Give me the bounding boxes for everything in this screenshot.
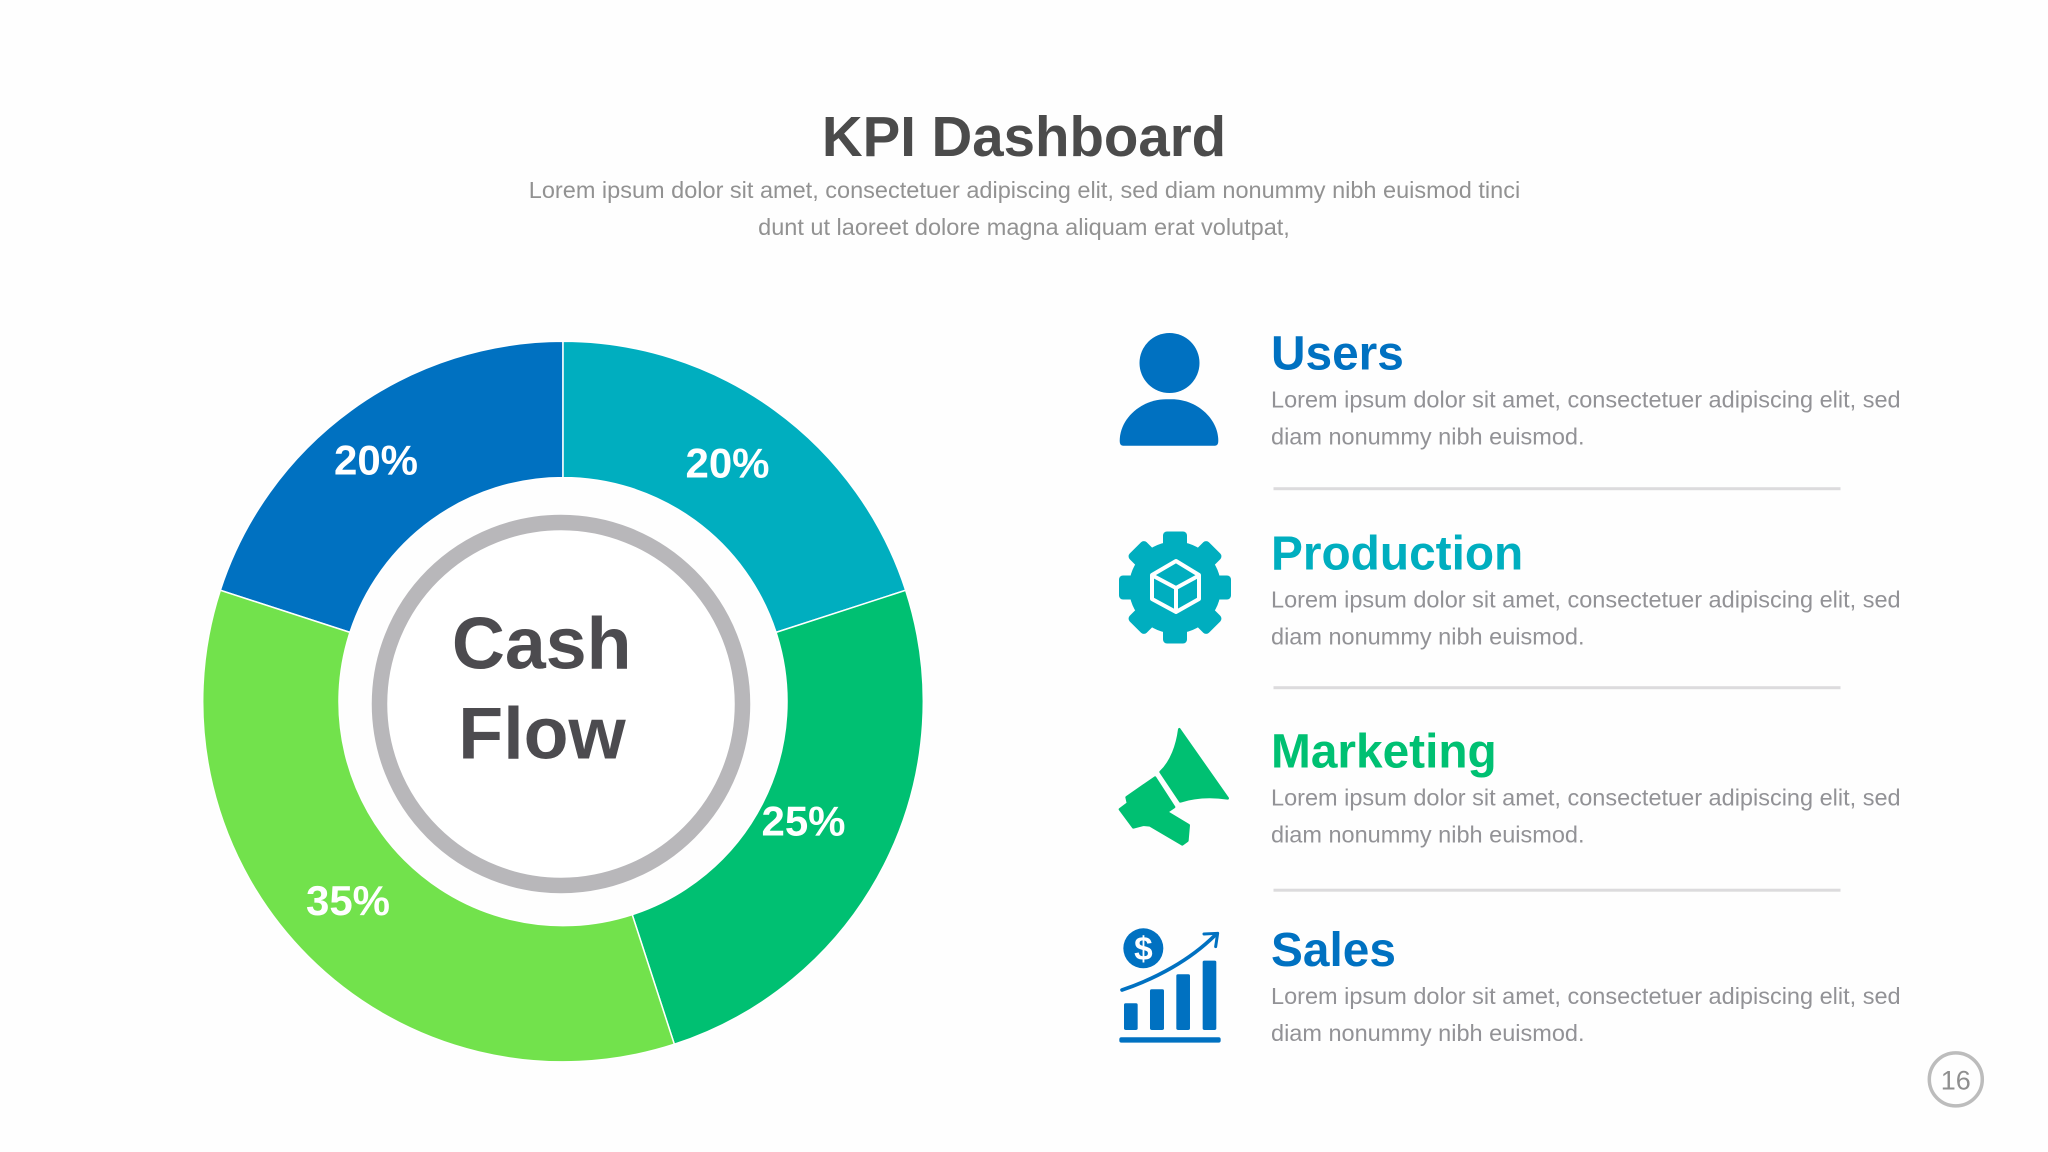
kpi: sales — [1119, 924, 1901, 1046]
icon: user — [1120, 333, 1218, 446]
center label: cash flow: Cash — [452, 602, 632, 684]
description: Lorem ipsum dolor sit amet, consectetuer adipiscing elit, sed — [1271, 387, 1901, 413]
subtitle text block: Lorem ipsum dolor sit amet, consectetuer adipiscing elit, sed diam nonummy nibh euismod tinci — [529, 177, 1520, 203]
page number: 16 — [1941, 1065, 1971, 1095]
icon: megaphone — [1120, 729, 1228, 844]
center label: cash flow: Flow — [458, 692, 627, 774]
donut chart: cash flow — [203, 341, 923, 1062]
subtitle text block: dunt ut laoreet dolore magna aliquam erat volutpat, — [758, 214, 1290, 240]
description — [1271, 387, 1901, 450]
segment: 20% teal — [563, 341, 906, 632]
description: Lorem ipsum dolor sit amet, consectetuer adipiscing elit, sed — [1271, 587, 1901, 613]
kpi: marketing — [1120, 725, 1901, 847]
heading: Production — [1271, 528, 1523, 581]
segment: 35% light green — [203, 590, 674, 1062]
description: Lorem ipsum dolor sit amet, consectetuer adipiscing elit, sed — [1271, 784, 1901, 810]
description — [1271, 784, 1901, 847]
description: Lorem ipsum dolor sit amet, consectetuer adipiscing elit, sed — [1271, 983, 1901, 1009]
segment: 20% blue — [220, 341, 563, 632]
description: diam nonummy nibh euismod. — [1271, 1020, 1584, 1046]
title: KPI Dashboard — [822, 105, 1226, 168]
percentage labels — [306, 436, 846, 924]
page number — [1929, 1053, 1982, 1106]
icon: gear with box — [1119, 532, 1231, 644]
heading: Users — [1271, 328, 1404, 381]
subtitle text block — [529, 177, 1520, 240]
percentage labels: 20% — [334, 436, 418, 484]
description — [1271, 983, 1901, 1046]
center label: cash flow — [452, 602, 632, 774]
percentage labels: 35% — [306, 877, 390, 924]
heading: Marketing — [1271, 725, 1497, 778]
icon: growth chart with coin: $ — [1134, 931, 1153, 968]
kpi: users — [1120, 328, 1901, 450]
description: diam nonummy nibh euismod. — [1271, 624, 1584, 650]
percentage labels: 25% — [761, 798, 846, 844]
description: diam nonummy nibh euismod. — [1271, 424, 1584, 450]
description — [1271, 587, 1901, 650]
center ring — [380, 522, 742, 886]
segment: 25% green — [632, 590, 923, 1044]
heading: Sales — [1271, 924, 1396, 977]
description: diam nonummy nibh euismod. — [1271, 821, 1584, 847]
icon: growth chart with coin — [1119, 928, 1221, 1043]
kpi: production — [1119, 528, 1901, 650]
percentage labels: 20% — [685, 440, 770, 486]
